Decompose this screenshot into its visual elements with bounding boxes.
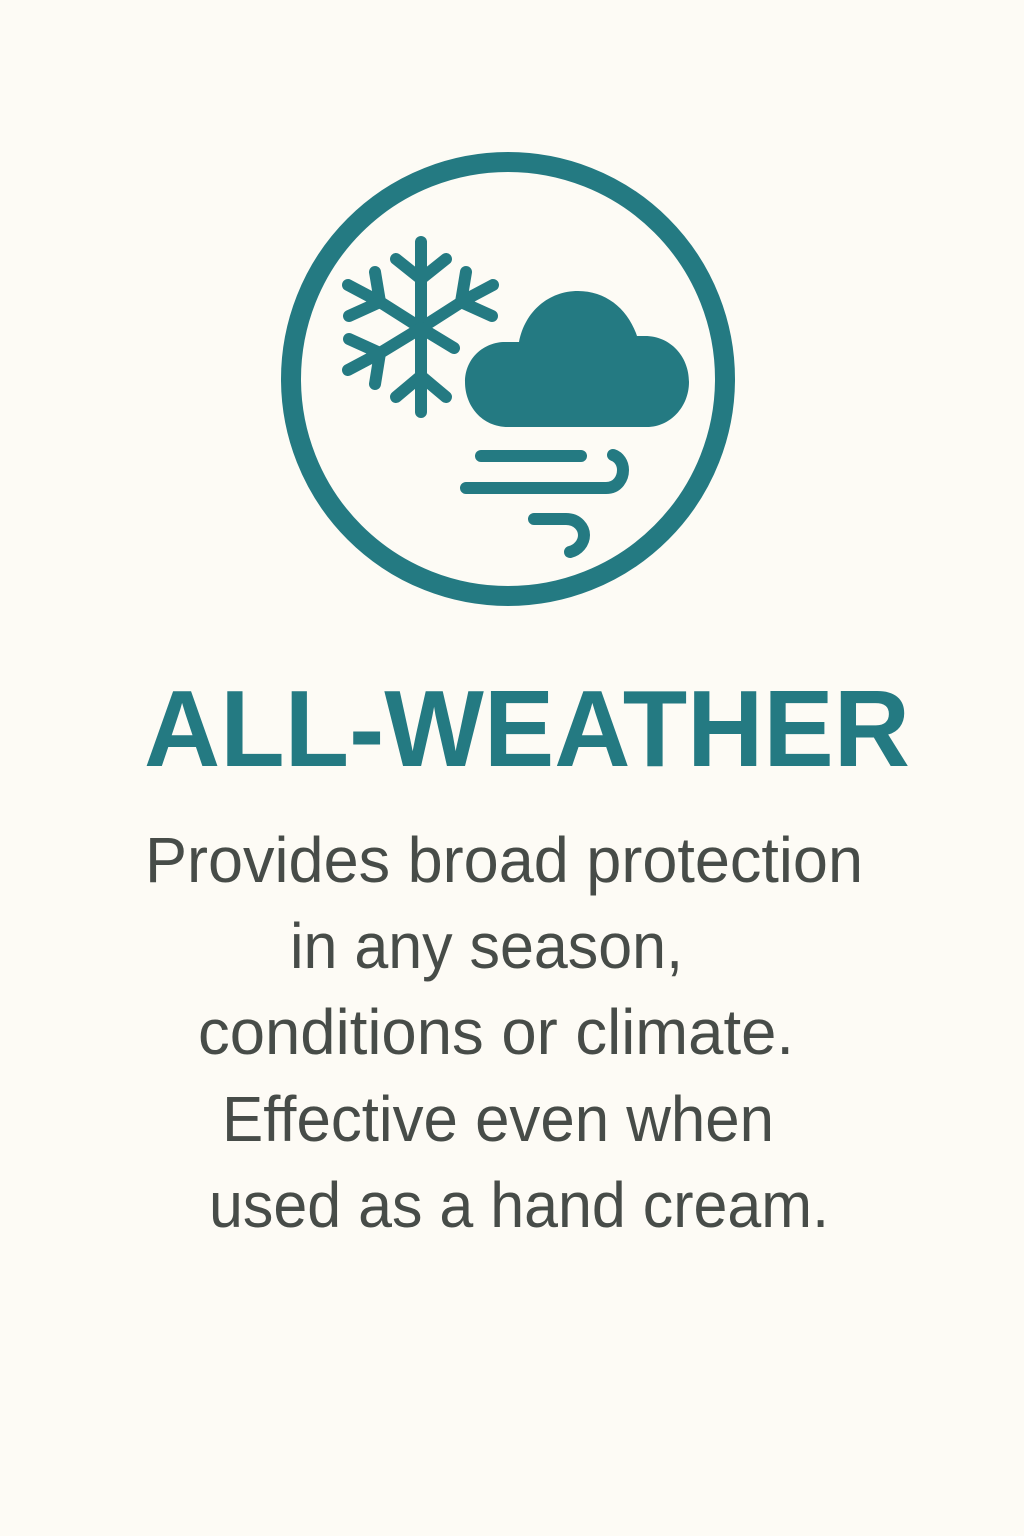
icon: all-weather badge (291, 162, 725, 596)
icon: circular ring (291, 162, 725, 596)
icon: snowflake (348, 242, 493, 412)
icon: cloud (465, 291, 689, 427)
text line 1: Provides broad protection (145, 824, 863, 896)
icon: wind lines (466, 455, 623, 552)
text line 4: Effective even when (222, 1083, 774, 1155)
body text (145, 824, 863, 1241)
text line 3: conditions or climate. (198, 996, 794, 1068)
text line 5: used as a hand cream. (209, 1169, 829, 1241)
text line 2: in any season, (290, 910, 683, 982)
title: ALL-WEATHER (144, 668, 910, 790)
